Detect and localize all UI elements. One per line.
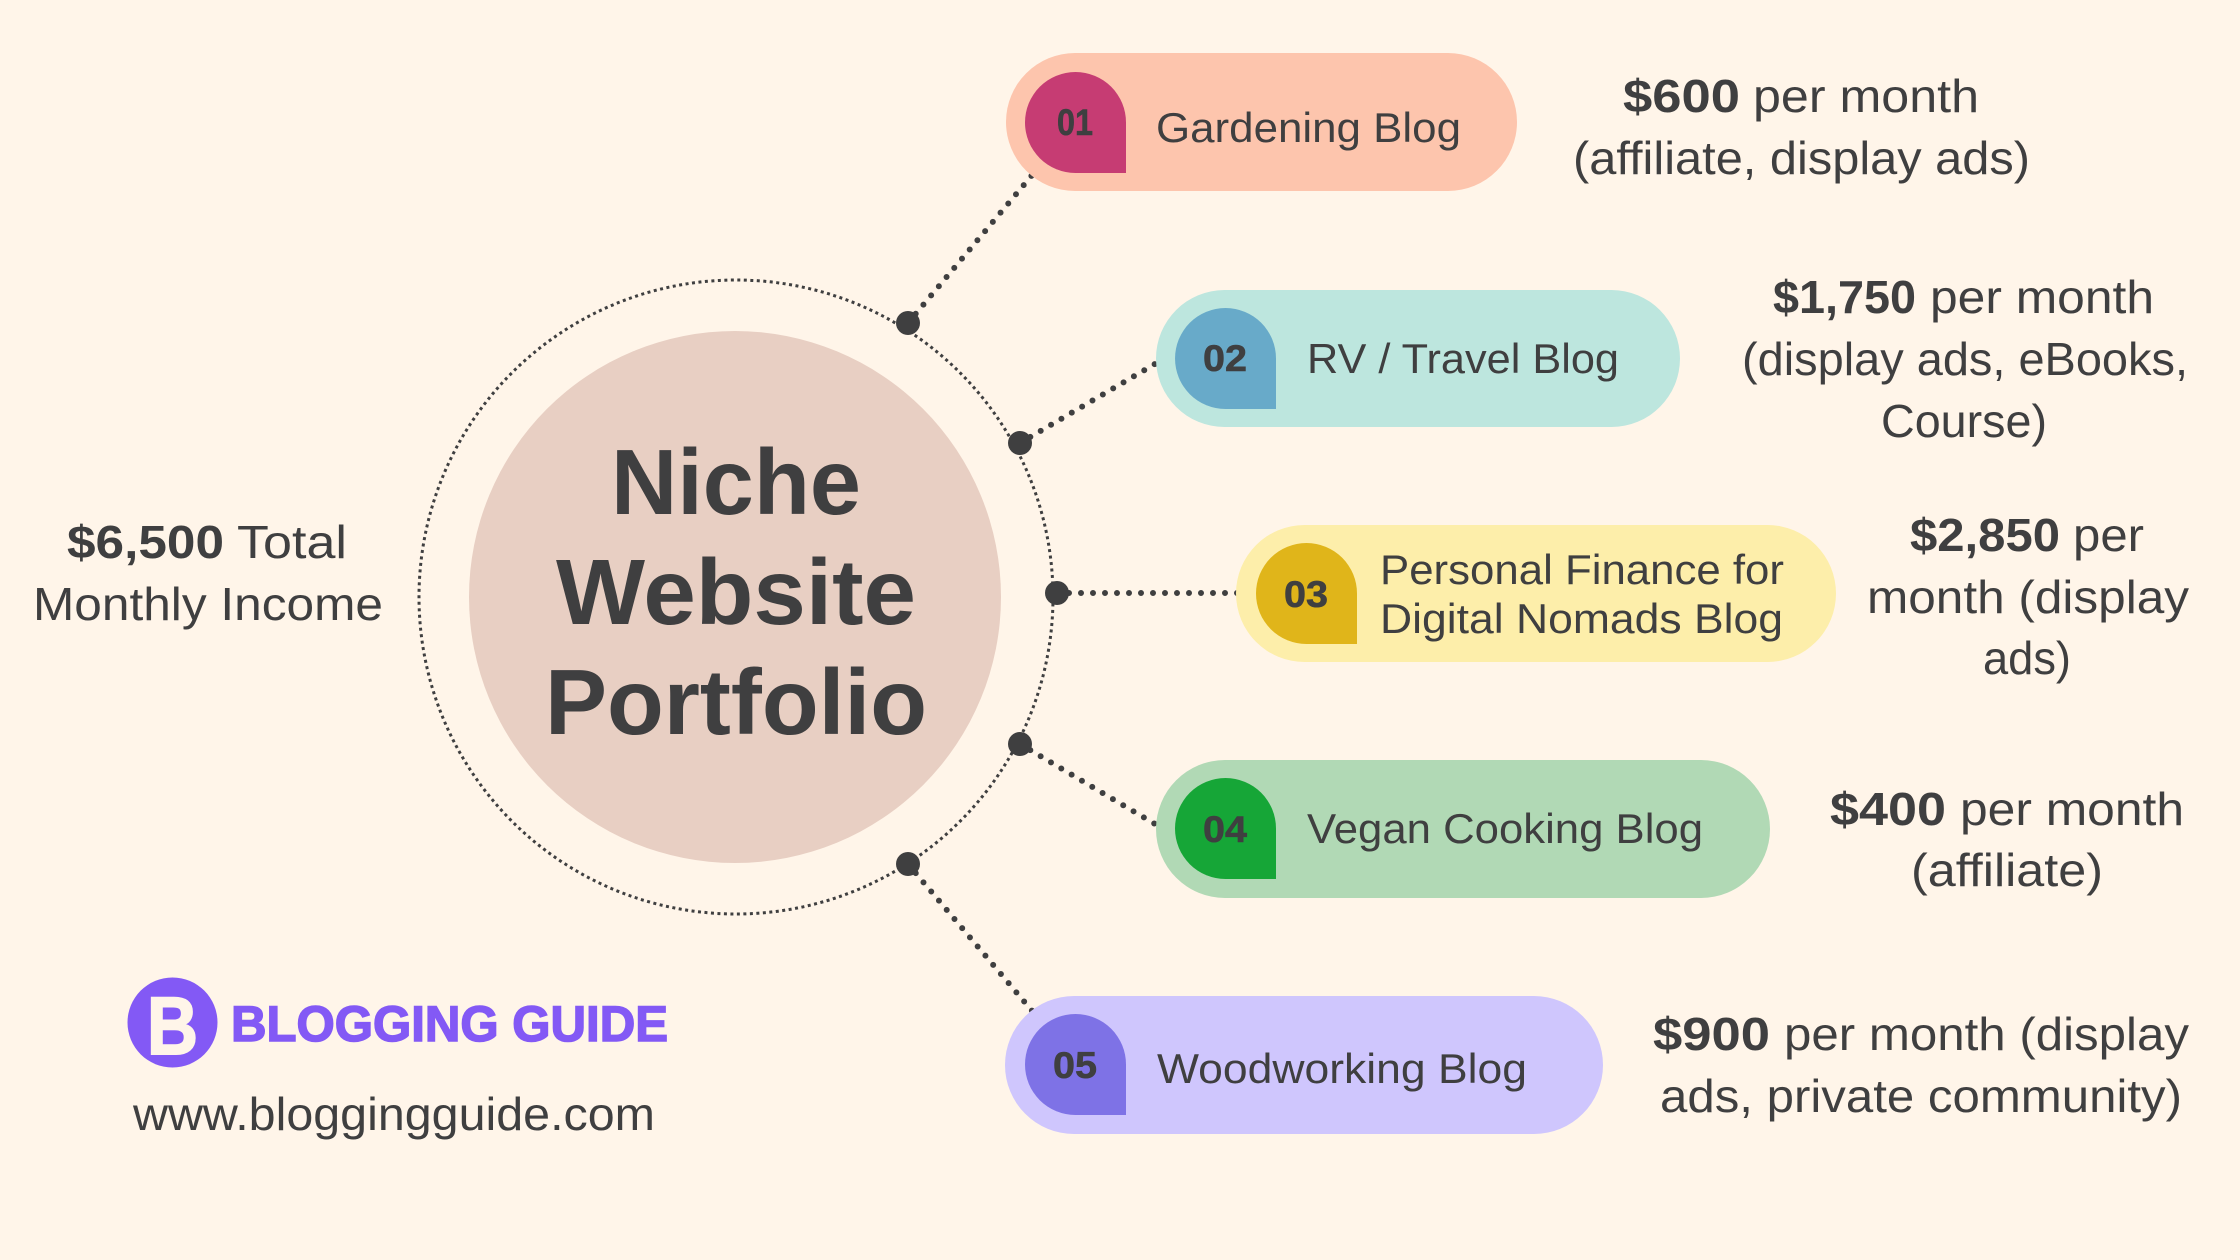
income text 04: $400 [1830,783,1946,835]
number 02: 02 [1203,338,1247,379]
label: Digital Nomads Blog [1380,595,1783,642]
label: Personal Finance for [1380,546,1784,593]
income text 03: $2,850 [1910,509,2060,561]
number 04: 04 [1203,809,1247,850]
number 01: 01 [1057,102,1093,143]
icon: B circle [128,978,218,1072]
income text 03: month (display [1867,571,2189,623]
income text 05: ads, private community) [1660,1070,2182,1122]
income text 01: (affiliate, display ads) [1573,132,2030,184]
badge 04 [1175,778,1276,879]
logo: Blogging Guide [128,978,668,1072]
income text 02: per month [1930,271,2154,323]
panel: 01 Gardening Blog [1006,53,1517,191]
connector 2 [1008,361,1160,455]
income text 02: Course) [1881,395,2047,447]
connector 1 [896,174,1033,335]
website url: www.bloggingguide.com [132,1088,655,1140]
income text 01: per month [1753,70,1979,122]
income text 05: $900 [1653,1008,1770,1060]
income text 03 [1867,509,2189,684]
income text 05 [1653,1008,2189,1122]
label: RV / Travel Blog [1307,335,1619,382]
income text 02 [1742,271,2188,447]
total income text: Monthly Income [33,578,383,630]
income text 01 [1573,70,2030,184]
income text 03: ads) [1983,632,2071,684]
total income text: Total [237,516,347,568]
income text 05: per month (display [1784,1008,2189,1060]
income text 04 [1830,783,2184,896]
income text 02: $1,750 [1773,271,1916,323]
badge 02 [1175,308,1276,409]
badge 03 [1256,543,1357,644]
title: Portfolio [545,650,927,754]
income text 04: (affiliate) [1911,844,2103,896]
central hub: dotted ring and title circle [419,280,1053,914]
total income text [33,516,383,630]
connector 3 [1045,581,1240,605]
label: Woodworking Blog [1157,1045,1527,1092]
wordmark: BLOGGING GUIDE [231,996,668,1052]
connector 4 [1008,732,1160,827]
connector 5 [896,852,1033,1012]
icon: B circle: B [147,981,198,1072]
income text 01: $600 [1623,70,1740,122]
total income text: $6,500 [67,516,224,568]
title [545,430,927,754]
dotted outer ring [419,280,1053,914]
label: Gardening Blog [1156,104,1461,151]
title: Niche [611,430,861,534]
panel: 02 RV / Travel Blog [1156,290,1680,427]
panel: 03 Personal Finance [1236,525,1836,662]
badge 01 [1025,72,1126,173]
panel: 05 Woodworking Blog [1005,996,1603,1134]
income text 03: per [2073,509,2144,561]
panel: 04 Vegan Cooking Blog [1156,760,1770,898]
number 05: 05 [1053,1045,1097,1086]
label: Vegan Cooking Blog [1307,805,1703,852]
label [1380,546,1784,642]
badge 05 [1025,1014,1126,1115]
number 03: 03 [1284,574,1328,615]
income text 02: (display ads, eBooks, [1742,333,2188,385]
title: Website [556,540,916,644]
income text 04: per month [1960,783,2184,835]
title circle [469,331,1001,863]
